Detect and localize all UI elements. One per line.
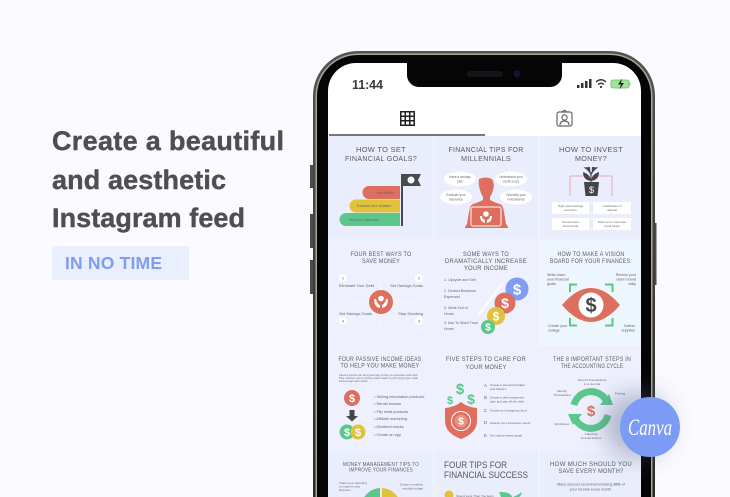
tile: accounting cycle: THE ACCOUNTING CYCLE: [561, 363, 623, 370]
tile: financial tips for millennials: credit score: [503, 180, 519, 184]
tile: vision board: BOARD FOR YOUR FINANCES:: [550, 258, 632, 265]
tile: five steps to care for your money: [445, 356, 531, 439]
steps list: C: [484, 408, 488, 413]
intro paragraph: extra enough each month.: [339, 379, 368, 383]
tile: financial tips for millennials: Evaluate your: [446, 193, 467, 197]
pie labels: monthly budget: [402, 486, 423, 490]
vision labels: Review your: [616, 273, 637, 277]
cycle labels: Transactions: [553, 393, 571, 397]
tile: how to invest money: bond funds: [604, 224, 620, 228]
tile: financial tips for millennials: Diversify your: [506, 193, 527, 197]
tile: money management tips: MONEY MANAGEMENT TIPS TO: [343, 462, 419, 468]
tag: in no time: [52, 246, 189, 280]
status icons: [577, 78, 631, 90]
savings note: [557, 482, 626, 492]
shield icon: $: [458, 416, 464, 428]
tile: how to invest money: Certificates of: [603, 204, 622, 208]
vision labels: [547, 273, 637, 332]
tile: accounting cycle: THE 8 IMPORTANT STEPS IN: [553, 356, 631, 363]
tile: financial tips for millennials: insurance: [449, 198, 463, 202]
tile: four best ways to save money: 1: [342, 276, 345, 280]
passive income list: [374, 394, 425, 437]
tile: four best ways to save money: 4: [342, 318, 345, 324]
tile: how to set financial goals: [340, 145, 421, 226]
saving hands badge: [369, 290, 393, 314]
falling dollar signs: $: [456, 381, 465, 398]
tile: increase your income: SOME WAYS TO: [463, 251, 509, 258]
tip number badge: [444, 490, 454, 497]
tile: four best ways to save money: SAVE MONEY: [362, 258, 400, 265]
tile: four best ways to save money: FOUR BEST WAYS TO: [350, 251, 412, 258]
tile: how much should you save: SAVE EVERY MONTH?: [558, 468, 624, 475]
tile: how much should you save: [550, 461, 632, 492]
goal steps: [340, 186, 400, 226]
steps list: Set values-based goals: [490, 434, 523, 438]
intro paragraph: Passive income can be a great way to help you generate extra cash.: [339, 373, 418, 377]
tile: how to invest money: High-yield savings: [558, 204, 584, 208]
intro paragraph: [339, 374, 418, 382]
tile: four best ways to save money: Eliminate Your Debt: [339, 283, 375, 288]
pie chart: [364, 488, 398, 497]
cycle labels: [553, 378, 625, 440]
steps list: plan and pay off the debt: [490, 400, 524, 404]
pie labels: Track your spending: [339, 481, 367, 485]
tile: financial tips for millennials: [440, 145, 532, 228]
tile: how much should you save: HOW MUCH SHOULD YOU: [550, 461, 632, 468]
vision labels: Write down: [547, 273, 565, 277]
cycle labels: Identify: [557, 389, 567, 393]
tile: financial tips for millennials: MILLENNIALS: [461, 154, 511, 163]
tile: how to set financial goals: FINANCIAL GOALS?: [345, 154, 417, 163]
tile: how to invest money: deposit: [607, 208, 617, 212]
tile: how to invest money: [552, 145, 631, 230]
coin flow: $: [344, 427, 350, 439]
canva badge: [620, 397, 680, 457]
growing coins: $: [501, 295, 509, 311]
headline: [52, 126, 284, 233]
vision labels: collage: [548, 328, 560, 332]
steps list: [484, 383, 531, 438]
passive income list: • Rental income: [374, 401, 401, 406]
tile: passive income ideas: TO HELP YOU MAKE MONEY: [340, 364, 420, 370]
pie labels: Create a realistic: [400, 482, 423, 486]
vision labels: supplies: [621, 328, 635, 332]
tile: four best ways to save money: 2: [418, 276, 421, 280]
canva badge shadow: [603, 392, 669, 458]
green leaves: [499, 492, 522, 497]
income list: [444, 278, 478, 331]
status bar time: 11:44: [352, 78, 383, 92]
tile: four tips for financial success: FOUR TIPS FOR: [444, 460, 507, 470]
goal flag: [401, 174, 421, 226]
income list: Expenses: [444, 295, 460, 299]
pie labels: to improve your: [339, 484, 360, 488]
tile: four best ways to save money: Set Savings Goals: [390, 283, 423, 288]
plant pot: $: [589, 185, 594, 195]
tile: four tips for financial success: FINANCIAL SUCCESS: [444, 470, 528, 480]
headline: and aesthetic: [52, 165, 226, 195]
tile: how to invest money: MONEY?: [575, 154, 607, 163]
vision labels: Gather: [624, 324, 636, 328]
cross dividers: [345, 275, 417, 329]
tile: money management tips: IMPROVE YOUR FINANCES: [349, 468, 413, 474]
steps list: and follow it: [490, 387, 506, 391]
pie labels: [339, 481, 423, 492]
thought bubbles: [440, 172, 532, 204]
notch: [407, 63, 562, 87]
steps list: Assess your insurance needs: [490, 421, 531, 425]
income list: 2. Deduct Business: [444, 289, 476, 293]
vision labels: vision board: [616, 278, 636, 282]
tile: vision board: HOW TO MAKE A VISION: [558, 251, 624, 258]
cycle labels: Journal Entries: [581, 436, 602, 440]
income list: 3. Work Out of: [444, 306, 469, 310]
intro paragraph: Plus, whether you're renting a side hustle or just trying to get a little: [339, 376, 419, 380]
cycle labels: Worksheet: [555, 422, 570, 426]
falling dollar signs: [447, 383, 475, 406]
coin flow: $: [349, 393, 355, 405]
tile: four tips for financial success: [444, 460, 528, 497]
vision labels: daily: [628, 282, 636, 286]
passive income list: • Dividend stocks: [374, 424, 404, 429]
tab: tagged icon: [557, 110, 572, 126]
falling dollar signs: $: [447, 395, 453, 407]
phone frame: [313, 51, 655, 497]
coin flow: [340, 390, 366, 440]
vision labels: Create your: [548, 324, 568, 328]
headline: Create a beautiful: [52, 126, 284, 156]
tile: four best ways to save money: [339, 251, 423, 329]
passive income list: • Create an app: [374, 432, 401, 437]
tile: how to invest money: HOW TO INVEST: [559, 145, 623, 154]
income list: 4. Ask To Work From: [444, 321, 478, 325]
tile: financial tips for millennials: plan: [457, 180, 463, 184]
number badges: [339, 274, 423, 325]
phone side buttons: [310, 165, 656, 294]
tile: five steps to care for your money: FIVE STEPS TO CARE FOR: [446, 356, 526, 363]
passive income list: • Affiliate marketing: [374, 416, 407, 421]
screen: [328, 63, 641, 497]
tile: financial tips for millennials: FINANCIAL TIPS FOR: [448, 145, 524, 154]
feed grid: [328, 136, 642, 497]
growing coins: [481, 278, 528, 334]
tile: how to invest money: accounts: [564, 208, 577, 212]
steps list: Create a personal budget: [490, 383, 525, 387]
tab: grid icon: [400, 111, 415, 126]
goal steps: Examine your situation: [357, 204, 391, 208]
cycle labels: Adjusting: [585, 432, 598, 436]
tile: four best ways to save money: Stop Smoking: [398, 311, 423, 316]
coin flow: $: [355, 427, 361, 439]
cycle labels: Record Transactions: [578, 378, 607, 382]
growing coins: $: [493, 310, 500, 324]
steps list: B: [484, 395, 487, 400]
tile backgrounds: [328, 136, 642, 497]
tile: increase your income: YOUR INCOME: [464, 265, 508, 272]
steps list: Create an emergency fund: [490, 408, 527, 412]
headline: Instagram feed: [52, 203, 245, 233]
falling dollar signs: $: [467, 391, 475, 407]
income list: 1. Upcycle and Sell: [444, 278, 476, 282]
income list: Home: [444, 312, 454, 316]
pie labels: finances: [339, 488, 351, 492]
person with laptop: [465, 178, 508, 228]
connector brackets: [570, 176, 612, 196]
vision labels: your financial: [547, 278, 569, 282]
steps list: D: [484, 420, 488, 425]
tile: how to invest money: Short-term corporate: [598, 220, 627, 224]
tile: how to set financial goals: HOW TO SET: [356, 145, 406, 154]
savings note: your income every month.: [570, 488, 612, 492]
steps list: Create a debt repayment: [490, 396, 524, 400]
tile: four best ways to save money: Set Savings Goals: [339, 311, 372, 316]
focus brackets: [570, 284, 612, 326]
tile: increase your income: [444, 251, 528, 334]
tile: five steps to care for your money: YOUR MONEY: [466, 364, 507, 371]
growing coins: $: [513, 282, 522, 298]
cycle labels: in a Journal: [584, 382, 600, 386]
eye icon: $: [585, 295, 597, 317]
tile: passive income ideas: [338, 357, 425, 440]
growing coins: $: [485, 322, 491, 334]
tile: financial tips for millennials: investments: [507, 198, 525, 202]
tile: increase your income: DRAMATICALLY INCREASE: [445, 258, 527, 265]
goal steps: Find your inspiration: [349, 218, 379, 222]
tag: in no time: IN NO TIME: [65, 253, 162, 273]
tile: vision board: [547, 251, 637, 332]
steps list: E: [484, 433, 487, 438]
grid backing: [328, 136, 642, 497]
passive income list: • Flip retail products: [374, 409, 408, 414]
goal steps: Your Stretch: [376, 191, 394, 195]
tile: four best ways to save money: 3: [418, 318, 421, 324]
savings note: Many sources recommend saving 20% of: [557, 482, 626, 486]
cycle arrows: [574, 392, 608, 428]
active tab underline: [329, 134, 485, 136]
cycle labels: Posting: [615, 392, 625, 396]
steps list: A: [484, 383, 487, 388]
vision labels: goals: [547, 282, 556, 286]
tile: how to invest money: Government: [562, 220, 579, 224]
tile: accounting cycle: [553, 356, 631, 440]
cycle dollar: $: [587, 403, 596, 420]
tile: financial tips for millennials: Understand your: [499, 175, 524, 179]
tile: how to invest money: bond funds: [563, 224, 579, 228]
option cards: [552, 202, 631, 230]
tile: financial tips for millennials: Have a savings: [449, 175, 471, 179]
phone: [310, 51, 656, 497]
growth arrow: [478, 284, 502, 316]
tile: passive income ideas: FOUR PASSIVE INCOME IDEAS: [338, 357, 422, 363]
canva badge: Canva: [628, 415, 672, 440]
income list: Home: [444, 327, 454, 331]
passive income list: • Selling information products: [374, 394, 425, 399]
tile: money management tips: [339, 462, 423, 497]
